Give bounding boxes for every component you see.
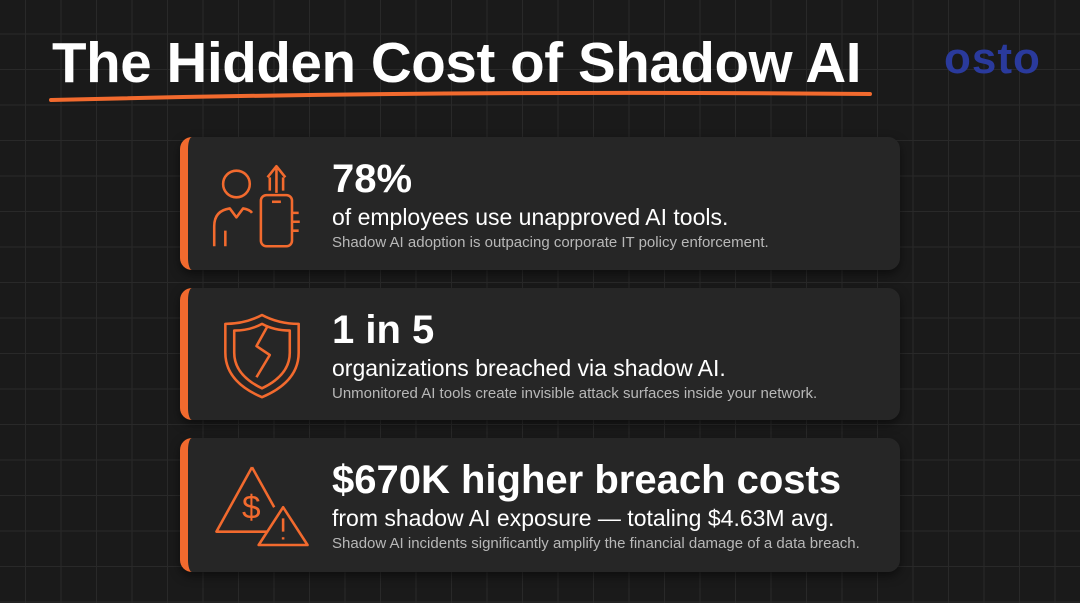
card: $670K [180,438,900,572]
card: $670K: from shadow AI exposure — totaling $4.63M avg. [332,505,834,531]
card: 78%: of employees use unapproved AI tools. [332,204,728,230]
icon: warning with dollar: $ [242,489,261,526]
card: 78%: 78% [332,157,412,201]
card: 78%: Shadow AI adoption is outpacing corporate IT policy enforcement. [332,234,769,251]
card: 1 in 5: Unmonitored AI tools create invisible attack surfaces inside your network. [332,385,817,402]
card: $670K: $670K higher breach costs [332,458,841,502]
card: 78% [180,137,900,270]
icon: person with phone [212,164,300,248]
icon: warning with dollar [215,466,309,546]
card: $670K: Shadow AI incidents significantly amplify the financial damage of a data breach. [332,535,860,552]
card: 1 in 5 [180,288,900,420]
card: 1 in 5: organizations breached via shadow AI. [332,355,726,381]
card: 1 in 5: 1 in 5 [332,308,434,352]
title: The Hidden Cost of Shadow AI [52,31,861,94]
icon: broken shield [224,314,300,398]
title underline [49,90,872,102]
logo: osto [944,34,1041,83]
